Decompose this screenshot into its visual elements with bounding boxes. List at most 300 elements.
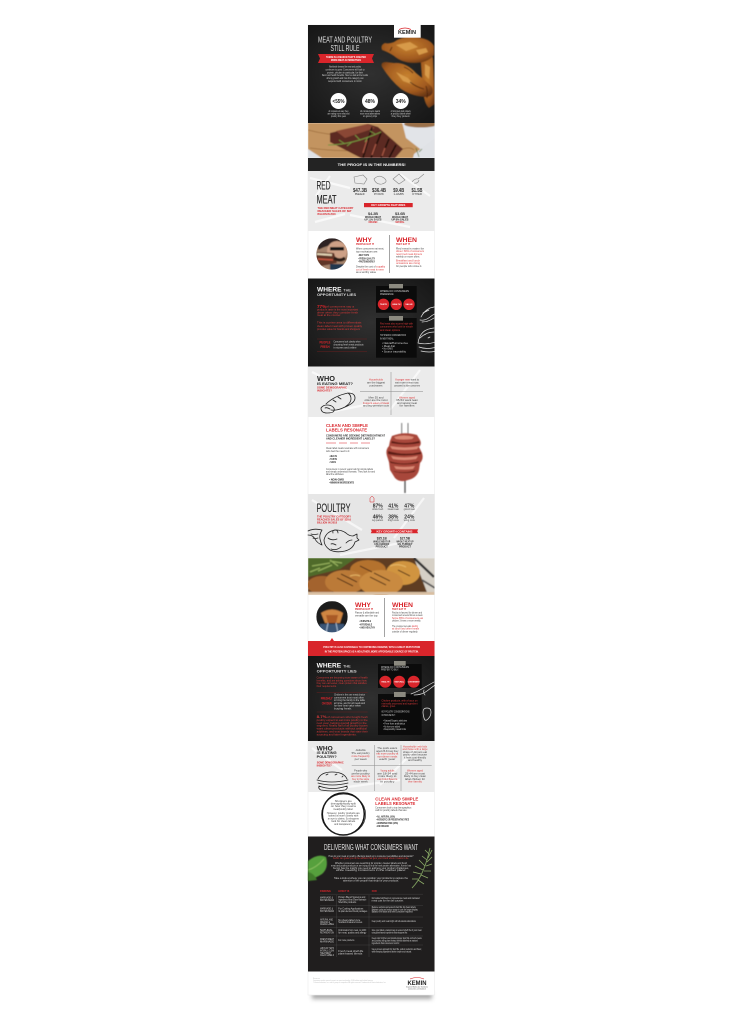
- card: clean label ingredients: TOP SPECIFIC CONSIDERATIONS: [380, 334, 406, 337]
- circled note: [322, 793, 366, 835]
- insight: bottom right: Women aged: [399, 396, 416, 400]
- insight: top left: Households: [369, 378, 384, 382]
- stat: 34 percent: 34%: [396, 99, 406, 105]
- text block: consumer preferences: label the attributes:: [326, 473, 344, 476]
- footer: [313, 978, 428, 990]
- row 2: PROTEIN BLEND: [320, 910, 334, 913]
- row 2: MARINADE &: [320, 908, 333, 910]
- callout: fresh chicken: for their best value when: [334, 705, 362, 708]
- heading: who is eating poultry: IS EATING: [317, 751, 337, 755]
- why text block: • MEAT TASTE: [358, 254, 369, 257]
- sketch: tongs and drumstick: [411, 682, 435, 720]
- row 4: RETARDATION: [320, 931, 334, 934]
- when text block: [392, 602, 423, 633]
- insight column 1 top: Adults: [356, 749, 367, 752]
- red meat sales note: BILLION IN 2018: [318, 213, 336, 216]
- stat: 48 percent: more meat alternatives: [360, 113, 381, 116]
- footnotes: © Kemin Industries, Inc. and its group of companies. All rights reserved. Trademarks of Kemin Industries, Inc.: [313, 981, 387, 984]
- card: why consumers buy: HEALTH: [392, 303, 401, 306]
- paragraph: poultry opportunity: benefits, and are asking questions about how: [317, 679, 367, 682]
- card: poultry considerations: claims, grow.: [382, 705, 396, 708]
- heading: where the opportunity lies: [317, 288, 357, 297]
- when text block: WHEN: [392, 602, 413, 609]
- stat: 48 percent: of consumers want: [360, 110, 380, 113]
- insight column 2 top: The quick eaters: [377, 747, 398, 750]
- photo: woman eating chicken: [316, 601, 348, 633]
- insight column 2 bottom: Young adults: [380, 770, 395, 772]
- stat: 34 percent: [391, 93, 411, 118]
- text block: meat claims: who feel the need to it:: [326, 450, 350, 453]
- row 5: FRESH MEAT: [320, 938, 334, 941]
- photo: basil leaves: [308, 856, 327, 881]
- callout: fresh meat: FRESH: [320, 345, 330, 349]
- intro paragraph: [322, 66, 369, 83]
- text block: consumer preferences: and simply understood formats. They look for and: [326, 471, 376, 474]
- page sheet: [308, 25, 434, 995]
- intro text: meat and poultry products or are trying to find the next protein alternative, Kemin has: [331, 864, 412, 868]
- text block: claims list: • ALL NATURAL (50%): [376, 816, 395, 818]
- stat: 77 percent: meat at the counter.: [317, 314, 341, 317]
- text block: claims list: • ANTIBIOTIC OR PRESERVATIVE FREE: [376, 819, 409, 822]
- heading: clean and simple: CLEAN AND SIMPLE: [326, 423, 368, 428]
- card: clean label ingredients: and clean options: [380, 329, 401, 332]
- percentage grid: 87%: [373, 504, 383, 510]
- title: DELIVERING WHAT CONSUMERS WANT: [324, 843, 418, 852]
- logo: footer: [406, 978, 428, 990]
- question: labels: AND CLEANER INGREDIENT LABELS?: [326, 436, 375, 440]
- percentage grid: 46%: [373, 514, 383, 520]
- row 5: For more products: [338, 939, 355, 942]
- logo box: KEMIN: [398, 30, 416, 36]
- question: labels: CONSUMERS ARE SEEKING DIET/WEIGHT/MEAT: [326, 434, 385, 438]
- intro paragraph: respond with consumers in mind.: [328, 80, 362, 83]
- row 2: Its plant-derived blend packages: [338, 910, 368, 913]
- photo: man eating sandwich: [316, 238, 348, 270]
- insight column 2 bottom: more likely to: [378, 775, 397, 778]
- card: poultry considerations: • Free from antibiotics: [383, 722, 406, 725]
- row 2: Balance the flavor and meet consumer requests: [372, 911, 413, 914]
- table headers: FOR: [372, 890, 377, 893]
- card: consumer preference: NATURAL: [395, 681, 405, 684]
- insight column 3 top: and those with a large: [402, 748, 428, 751]
- stat: 77 percent: product's taste is the most important: [317, 308, 358, 312]
- paragraph: poultry opportunity: Consumers are becoming more aware of health: [317, 676, 368, 680]
- circled note: looked at more closely with: [328, 815, 359, 818]
- text block: meat claims: • SAFE: [329, 461, 336, 464]
- heading: clean and simple: [375, 796, 419, 806]
- sketch: sausage: [321, 393, 355, 413]
- why text block: • VERSATILE: [359, 620, 371, 623]
- circled note: look for clean labels: [331, 820, 356, 823]
- insight column 2 top: non-dinner meals: [377, 755, 398, 758]
- stat: 27.5B: 9% TURKEY: [398, 543, 413, 546]
- panel: where the opportunity lies, poultry: [308, 656, 435, 741]
- card: clean label ingredients: • Natural/Hormone-free: [382, 342, 409, 345]
- stat: 48 percent: on grocery trips: [363, 115, 378, 118]
- logo: footer: KEMIN: [408, 981, 426, 987]
- insight column 3 bottom: the family: [408, 781, 423, 784]
- callout: fresh chicken: [321, 694, 366, 710]
- why text block: PEOPLE EAT IT: [356, 243, 374, 246]
- insight column 3 bottom: likely to buy clean: [404, 775, 427, 778]
- why text block: [355, 602, 380, 630]
- row 3: CLEAN LABEL: [320, 923, 335, 926]
- when text block: Breakfast and lunch: [396, 260, 421, 262]
- row 3: NATURAL AND: [320, 918, 333, 922]
- paragraph: poultry opportunity: their requirements.: [317, 685, 337, 688]
- sketch: sandwich and burger: [418, 306, 434, 352]
- why text block: Despite the cost of a quality: [356, 266, 386, 269]
- insight column 3 top: poultry often because: [403, 754, 428, 757]
- why text block: PEOPLE EAT IT: [355, 608, 373, 611]
- card: poultry considerations: KEY POULTRY CONSIDERATIONS: [382, 710, 410, 714]
- row 6: NATURAL & CLEAN: [320, 949, 334, 952]
- stat: 3.6B: UP 8% SALES: [392, 218, 409, 221]
- paragraph: protein choice: provides value for brands and shoppers: [317, 328, 361, 331]
- stat: 34 percent: they buy protein: [392, 115, 410, 118]
- text block: meat claims: • TASTE: [329, 458, 337, 461]
- row 1: Protein Blend Systems and: [338, 896, 366, 899]
- intro paragraph: driving growth and how this category can: [326, 77, 364, 80]
- card: poultry considerations: • Natural/Organic attributes: [383, 720, 408, 722]
- insight column 2 bottom: [377, 770, 398, 784]
- stat: 3.6B: [392, 211, 409, 224]
- circled note: and transparency.: [334, 823, 353, 826]
- poultry sales note: THE POULTRY CATEGORY: [317, 516, 351, 518]
- callout: fresh meat: Consumers look closely when: [334, 340, 361, 344]
- insight column 3 top: share of dinners eat: [403, 751, 427, 754]
- percentage grid: leg quarters: [372, 519, 384, 522]
- text block: consumer preferences: • MINIMUM INGREDIENTS: [329, 481, 354, 484]
- row 5: ingredients that consumers look for.: [372, 942, 400, 945]
- intro text: [328, 855, 414, 882]
- why text block: • AND HEALTHY: [359, 627, 375, 630]
- circled note: an eye to claims. So shoppers: [328, 817, 360, 820]
- heading: clean and simple: LABELS RESONATE: [326, 427, 367, 432]
- panel: why and when red meat: [316, 235, 425, 274]
- footnotes: [313, 978, 387, 984]
- row 4: NATURAL: [320, 929, 334, 932]
- question: labels: [326, 434, 385, 440]
- insight: top left: purchasers: [370, 384, 383, 387]
- footnotes: Consumer market research reports on meat and poultry, 2018 edition and related sources: [313, 979, 373, 982]
- row 3: Sodium/natural cures: [338, 921, 363, 924]
- row 2: [320, 906, 418, 914]
- intro text: attention of the people that shop for your products.: [343, 879, 399, 882]
- row 6: Fresh meat shelf-life: [338, 950, 364, 953]
- panel: delivering what consumers want: [308, 836, 434, 972]
- stat: 3.6B: $3.6B: [395, 211, 405, 216]
- card: clean label ingredients: IN MEAT MEAL:: [380, 337, 394, 340]
- panel: who is eating meat: [308, 366, 434, 417]
- when text block: report red meat dinners: [396, 253, 423, 256]
- panel: why and when poultry: [316, 598, 423, 637]
- sketch: wing and whole chicken: [308, 529, 359, 552]
- card: clean label ingredients: • No GMO: [382, 348, 393, 351]
- heading: who is eating meat: IS EATING MEAT?: [317, 382, 354, 386]
- intro paragraph: protein, chicken in particular, for their: [327, 71, 363, 74]
- callout: fresh chicken: FRESHLY: [321, 696, 333, 700]
- when text block: for people who crave it.: [396, 265, 422, 268]
- card: poultry considerations: IN HOW WE BUY:: [382, 714, 396, 717]
- percentage grid: [370, 496, 416, 522]
- stat: fresh beef: [353, 175, 367, 196]
- intro text: Kemin can guide you to the solution that gets your brand where it wants to be.: [333, 857, 409, 860]
- heading: clean and simple: [326, 423, 368, 432]
- percentage grid: breast meat: [388, 508, 399, 511]
- photo: roasted chicken drumsticks: [381, 37, 435, 108]
- insight column 2 top: aged 25-34 say they: [376, 750, 399, 753]
- logo: footer: Inspired Molecular Solutions: [406, 986, 428, 988]
- why text block: as a worthy value: [356, 271, 377, 274]
- card: poultry considerations: • Responsibly raised birds: [383, 728, 407, 731]
- stat: 4.2B: $4.2B: [368, 211, 378, 216]
- panel: clean and simple labels, poultry: [322, 793, 419, 835]
- heading: where the opportunity lies: [317, 664, 358, 674]
- heading: who is eating meat: INSIGHTS?: [317, 390, 333, 392]
- stat: 4.2B: WHOLE MEAT: [365, 216, 382, 219]
- circled note: However, poultry products are: [327, 812, 360, 815]
- red ribbon subtitle: MORE MEAT ALTERNATIVES: [331, 59, 361, 62]
- stat paragraph: segment. Nearly half of all poultry buyers: [317, 725, 369, 728]
- card: consumer preference: [378, 661, 422, 688]
- row 6: while keeping ingredient labels simple and natural.: [372, 950, 412, 953]
- when text block: [396, 237, 425, 268]
- callout: fresh meat: in stores and online: [334, 346, 357, 350]
- title: [318, 36, 372, 53]
- row 4: Optimization from meat, no GMO: [338, 929, 366, 932]
- intro text: Take a look at where you can position your products to capture the: [334, 877, 409, 880]
- why text block: versatile are the top:: [355, 614, 378, 617]
- insight: bottom left: frequent eaters of steak: [363, 402, 390, 405]
- insight: bottom right: for families: [400, 405, 416, 408]
- callout: fresh chicken: consumers trust most often: [334, 696, 365, 699]
- stat: 55 percent: poultry this year: [331, 115, 346, 118]
- heading: who is eating meat: SOME DEMOGRAPHIC: [317, 386, 347, 390]
- insight: top right: eat more meat now,: [395, 381, 419, 384]
- percentage grid: ground meat: [404, 508, 415, 511]
- callout: fresh meat: choosing fresh meat products: [334, 344, 364, 346]
- why text block: WHY: [356, 237, 373, 244]
- panel: clean and simple labels, meat: [326, 423, 423, 493]
- heading: who is eating poultry: SOME DEMOGRAPHIC: [317, 762, 344, 764]
- card: clean label ingredients: • Meat-Fat: [382, 345, 395, 348]
- card: clean label ingredients: [376, 316, 417, 358]
- insight: top right: [394, 378, 421, 387]
- stat: 35.1B: PRODUCT: [376, 545, 388, 548]
- row 1: Ingredients Meat Glaze Marinade: [338, 898, 367, 901]
- stat: fresh beef: BEEF: [355, 193, 366, 196]
- row 1: Shelf-life products: [338, 901, 357, 904]
- why text block: cut of fresh meat is seen: [356, 268, 385, 271]
- stat: 55 percent: of consumers say they: [328, 110, 349, 113]
- stat: 3.6B: NATURAL: [396, 221, 405, 224]
- stat: 77 percent: driver when they consider fresh: [317, 311, 359, 314]
- card: why consumers buy: [376, 284, 417, 313]
- insight: bottom left: [363, 396, 390, 408]
- stat: 55 percent: are eating more meat and: [328, 113, 350, 116]
- insight column 1 top: per week: [355, 758, 368, 761]
- insight column 2 top: eat more poultry at: [376, 753, 399, 756]
- percentage grid: wing cuts: [404, 519, 416, 522]
- callout: fresh chicken: buying fresh.: [334, 708, 352, 710]
- heading: where the opportunity lies: OPPORTUNITY LIES: [317, 670, 358, 674]
- when text block: consumed several times a week.: [392, 614, 423, 617]
- divider: [384, 598, 386, 637]
- poultry sales note: [317, 516, 352, 524]
- callout: fresh chicken: Chicken is the one meat choice: [334, 694, 366, 696]
- stat: 27.5B: WHOLE MEAT UP: [396, 541, 414, 544]
- stat paragraph: want clean products without artificial: [317, 728, 367, 731]
- stat: pork: [372, 176, 386, 196]
- row 1: PROTEIN BLEND: [320, 899, 334, 902]
- row 5: and poultry using plant extract blends labeled as natural: [372, 939, 418, 942]
- card: consumer preference: CONVENIENT: [408, 682, 420, 684]
- when text block: at lunch and other meals: [392, 628, 420, 631]
- red banner: key growth: KEY GROWTH CONTAINS: [376, 529, 413, 533]
- insight: top left: are the biggest: [367, 381, 385, 384]
- why text block: Flavour & affordable and: [355, 612, 380, 614]
- logo: footer: www.kemin.com/foodtech: [408, 988, 426, 990]
- red ribbon subtitle: THERE IS A REASON THAT'S CREATED: [326, 56, 366, 59]
- stat paragraph: 8.7% of consumers who bought fresh: [317, 715, 368, 719]
- stat: 34 percent: at product labels when: [391, 113, 411, 116]
- paragraph: protein choice: This is a prime area to differentiate:: [317, 322, 362, 324]
- row 3: ORGANIC &: [320, 921, 330, 924]
- stat: other meat: OTHER: [412, 193, 422, 196]
- red banner: key growth: KEY GROWTH FEATURES: [371, 203, 406, 207]
- poultry sales note: BILLION IN 2018: [317, 522, 338, 524]
- heading: who is eating poultry: [317, 745, 344, 768]
- row 1: meat cuts for the deli counter.: [372, 899, 404, 902]
- stat: 77 percent: of consumers say a: [326, 306, 355, 308]
- red callout band: IN THE PROTEIN SPACE AS A HEALTHIER, MORE AFFORDABLE SOURCE OF PROTEIN.: [325, 649, 419, 653]
- stat: pork: PORK: [374, 193, 385, 196]
- callout: fresh meat: [320, 340, 364, 350]
- row 6: CLEAN LABELS: [320, 954, 334, 957]
- row 6: TREATMENT: [320, 952, 331, 955]
- stat paragraph: additives, and trust brands that state their: [317, 730, 368, 734]
- panel: poultry: [308, 494, 434, 558]
- row 5: MARINADE: [320, 940, 334, 943]
- insight: bottom right: and natural meat: [397, 402, 417, 405]
- panel: header: [308, 24, 435, 123]
- footnotes: Sources:: [313, 978, 321, 980]
- row 6: plant-based blends: [338, 952, 363, 955]
- insight column 2 top: each year: [379, 758, 396, 761]
- card: clean label ingredients: Red meat also scores high with: [380, 322, 414, 326]
- heading: who is eating meat: [317, 376, 354, 392]
- stat: 35.1B: WHOLE MEAT UP: [373, 541, 391, 544]
- when text block: weekly or more often.: [396, 256, 420, 259]
- heading: where the opportunity lies: WHERE THE: [317, 288, 352, 294]
- stat: 55 percent: <55%: [332, 99, 345, 105]
- card: why consumers buy: WHERE DO CONSUMERS: [380, 290, 409, 293]
- card: poultry considerations: minimally processed and ingredient: [382, 702, 418, 705]
- why text block: When consumers eat meat,: [356, 248, 384, 250]
- intro text: while meeting consumers in the market place.: [336, 869, 406, 872]
- heading: who is eating poultry: INSIGHTS?: [317, 764, 332, 768]
- heading: poultry: POULTRY: [316, 503, 351, 515]
- insight column 2 bottom: in poultry: [380, 781, 395, 784]
- row 6: LAB PLANT TESTS: [320, 947, 334, 950]
- row 2: For Cooling Applications: [338, 908, 364, 910]
- percentage grid: 41%: [388, 504, 398, 510]
- stat: 48 percent: 48%: [365, 99, 375, 105]
- row 4: Give your label a natural way to extend shelf life of your meat: [372, 929, 422, 932]
- stat: 4.2B: ORGANIC: [368, 221, 378, 224]
- row 1: MARINADE &: [320, 896, 333, 900]
- card: clean label ingredients: • Source traceability: [382, 350, 407, 353]
- callout: fresh chicken: CHOSEN: [322, 702, 332, 706]
- insight column 1 top: [352, 749, 371, 761]
- when text block: outside of dinner regularly.: [392, 630, 418, 633]
- text block: claims list: Consumers look to top demographics: [375, 806, 412, 810]
- photo: sliced steak on wooden board: [308, 120, 438, 158]
- stat: 77 percent: [317, 304, 359, 317]
- paragraph: poultry opportunity: [317, 676, 368, 688]
- title: STILL RULE: [330, 44, 360, 53]
- stat: lamb: [393, 174, 405, 196]
- row 2: Maintain color and reduce purge in cuts for longer display: [372, 908, 418, 911]
- heading: who is eating poultry: WHO: [317, 745, 333, 752]
- insight column 1 bottom: prefer poultry: [352, 772, 371, 775]
- row 1: Formulate bold flavors in convenience meals and marinated: [372, 897, 420, 900]
- insight column 1 bottom: buy in the store: [352, 778, 370, 781]
- stat: 27.5B: PRODUCT: [399, 545, 412, 548]
- intro paragraph: continues to grow. Consumers still look to: [326, 68, 365, 71]
- heading: red meat: RED: [316, 178, 331, 192]
- red ribbon subtitle: [318, 54, 374, 63]
- insight column 1 top: 55+ eat poultry: [352, 752, 371, 755]
- insight column 3 top: [402, 746, 428, 762]
- card: consumer preference: HEALTH: [381, 681, 390, 684]
- callout: fresh chicken: to bring the family to the table: [334, 699, 366, 702]
- insight column 1 bottom: People who: [354, 770, 368, 772]
- intro paragraph: Worldwide demand for meat and poultry: [329, 66, 362, 68]
- row 1: [320, 896, 420, 904]
- insight column 3 bottom: label chicken for: [405, 778, 425, 781]
- poultry sales note: REACHED SALES OF $35.6: [317, 518, 352, 522]
- when text block: occasions are rising: [396, 262, 421, 265]
- text block: meat claims: • HEALTH: [329, 455, 337, 458]
- stat paragraph: poultry expect to eat more poultry in the: [317, 719, 369, 722]
- insight: bottom left: and buy premium cuts: [363, 405, 390, 408]
- red callout band: POULTRY IS ALSO FAVORABLE TO CONTINUING DEMAND, WITH A GREAT REPUTATION: [323, 645, 420, 649]
- when text block: Some 65% of consumers eat: [392, 617, 423, 620]
- heading: where the opportunity lies: OPPORTUNITY LIES: [317, 293, 357, 297]
- callout: fresh chicken: at home, and for all meals and: [334, 702, 366, 705]
- intro paragraph: flavor and health benefits. Here's a look at the trends: [322, 74, 369, 77]
- stat: 77 percent: 77%: [317, 304, 326, 309]
- circled note: Shoppers are: [335, 800, 353, 803]
- card: poultry considerations: • No hormone added: [383, 725, 401, 728]
- insight column 3 top: it feels cost-friendly: [404, 756, 427, 759]
- proof banner: [308, 158, 434, 171]
- stat: 55 percent: [328, 93, 350, 118]
- insight: bottom left: older are the most: [364, 399, 388, 402]
- red meat sales note: REACHED SALES OF $97: [318, 210, 352, 213]
- stat: lamb: $9.4B: [393, 188, 404, 194]
- card: clean label ingredients: consumers who look for simple: [380, 326, 414, 329]
- card: poultry considerations: [378, 692, 422, 735]
- why text block: • FRESH QUALITY: [358, 257, 375, 260]
- card: why consumers buy: TASTE: [380, 303, 388, 306]
- why text block: [356, 237, 386, 274]
- text block: claims list: • HORMONE FREE (43%): [376, 822, 398, 825]
- row 6: Use a proven approach for shelf life, sodium reduction and flavor,: [372, 948, 422, 951]
- text block: consumer preferences: Consumers in recent years look for simple labels: [326, 468, 374, 471]
